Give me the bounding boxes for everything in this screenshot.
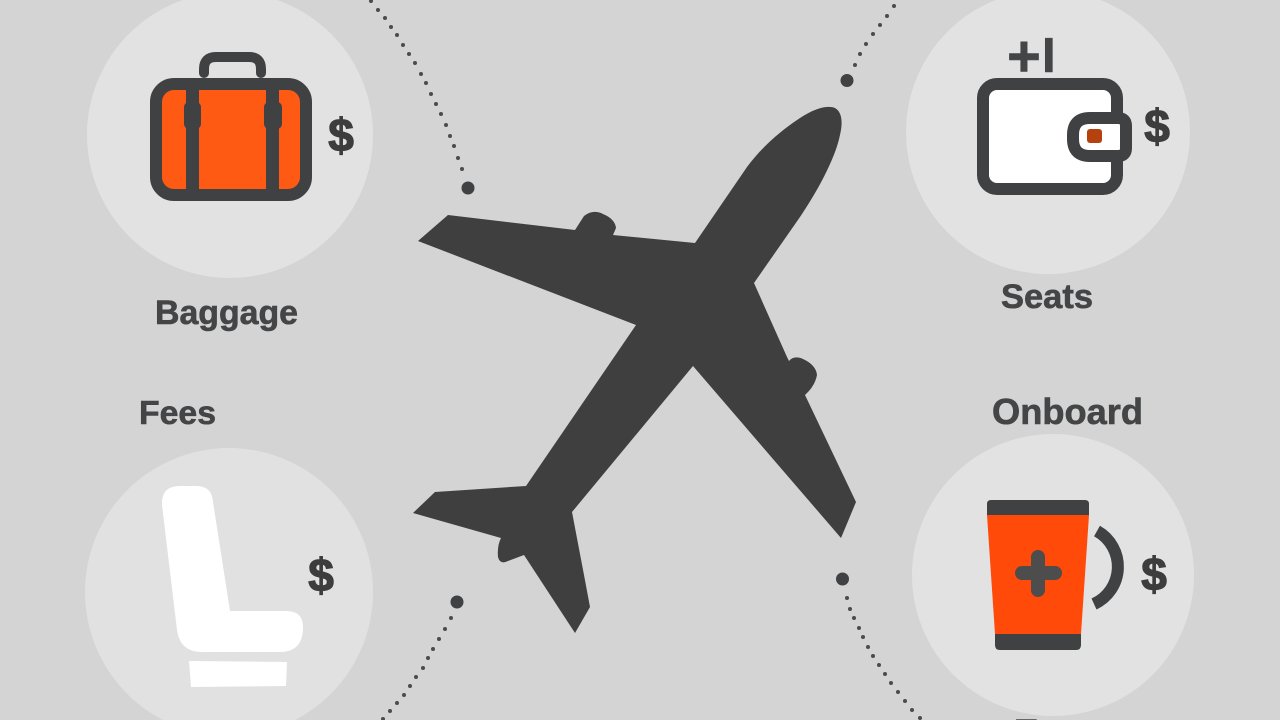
onboard label: Onboard <box>992 391 1143 432</box>
icon: cup <box>987 500 1118 650</box>
icon: wallet <box>983 84 1126 189</box>
fees label: Fees <box>139 394 216 431</box>
dotted connector: onboard <box>836 572 922 720</box>
onboard cost symbol: $ <box>1141 548 1167 600</box>
baggage cost symbol: $ <box>328 109 354 161</box>
icon: seat <box>162 486 303 687</box>
icon: airplane silhouette <box>413 107 856 633</box>
plus one mark: + <box>1007 24 1041 89</box>
panel: seats <box>906 0 1190 316</box>
seats cost symbol: $ <box>1144 100 1170 152</box>
dotted connector: fees <box>381 596 464 720</box>
icon: suitcase <box>156 57 306 195</box>
baggage circle <box>87 0 373 278</box>
seats circle <box>906 0 1190 274</box>
onboard circle <box>912 434 1194 716</box>
plus one mark: I <box>1042 29 1056 83</box>
dotted connector: baggage <box>369 0 474 194</box>
panel: onboard <box>912 391 1194 720</box>
baggage label: Baggage <box>155 294 298 332</box>
seats label: Seats <box>1001 278 1093 316</box>
fees circle <box>85 448 373 720</box>
panel: baggage <box>87 0 373 332</box>
dotted connector: seats <box>840 4 896 87</box>
fees cost symbol: $ <box>308 549 334 601</box>
panel: fees <box>85 394 373 720</box>
